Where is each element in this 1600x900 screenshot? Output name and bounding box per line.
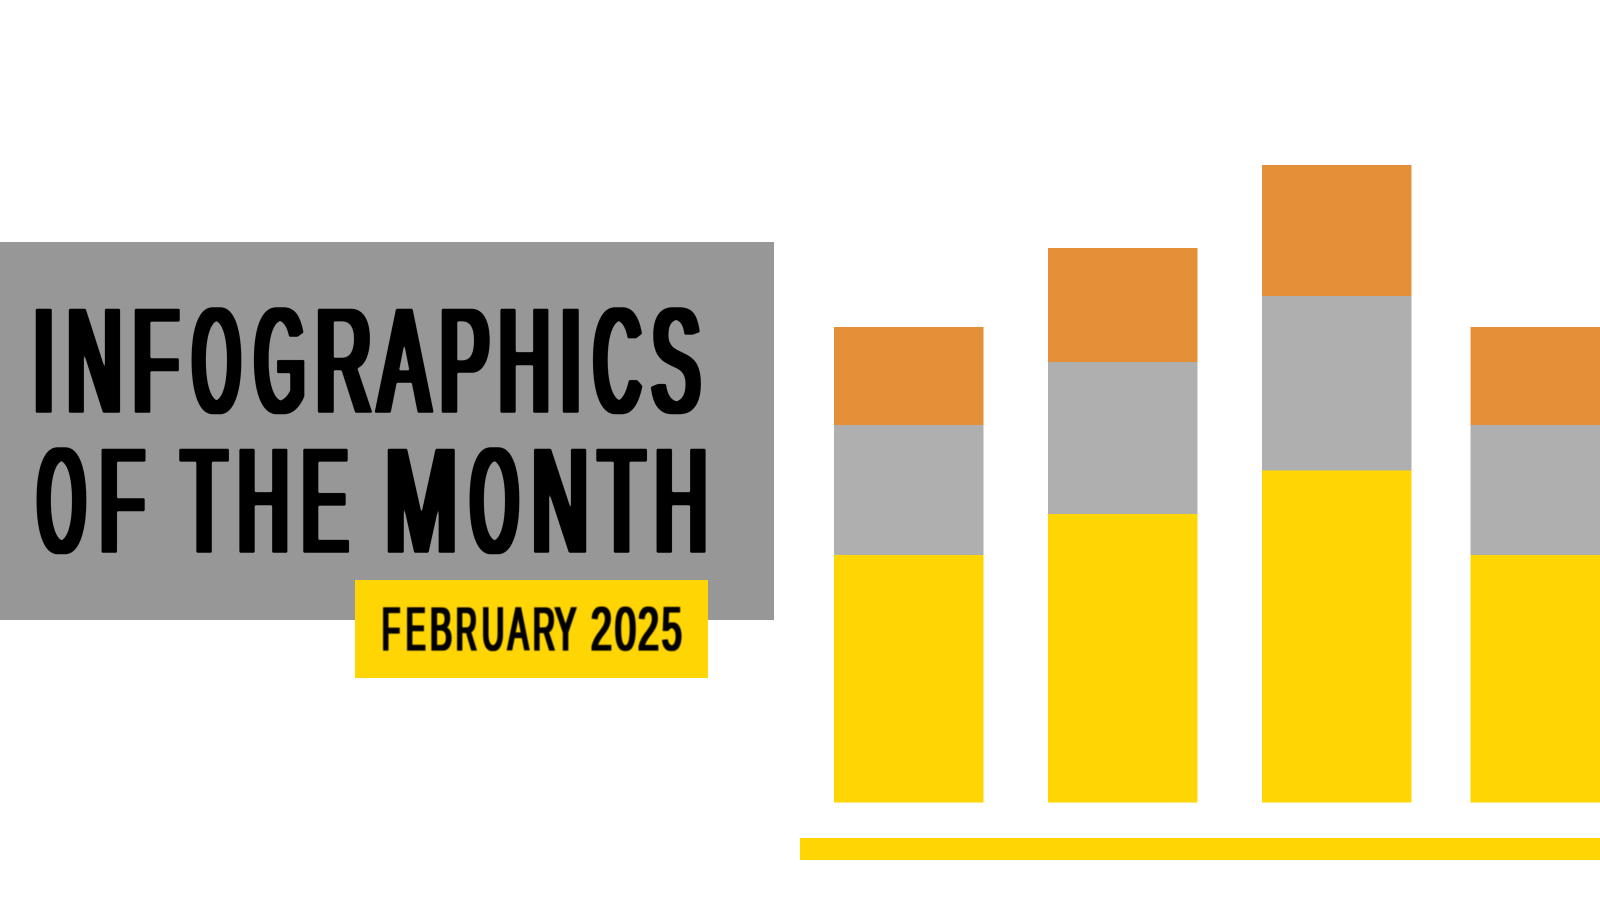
title line 2: E <box>302 417 347 584</box>
date text: Y <box>555 595 576 663</box>
date text: 2 <box>591 595 612 663</box>
date text: 5 <box>662 595 682 663</box>
title line 2: T <box>182 417 226 584</box>
panel: title background <box>0 242 774 620</box>
title line 2: O <box>470 417 517 584</box>
title line 2 <box>36 417 707 584</box>
title line 2: F <box>100 417 144 584</box>
title line 1: C <box>594 277 641 444</box>
bar 3 <box>1262 165 1412 802</box>
date text: 2 <box>638 595 659 663</box>
title line 2: M <box>385 417 458 584</box>
date text <box>382 595 682 663</box>
bar 4 <box>1470 327 1600 802</box>
title line 1: I <box>33 277 55 444</box>
title line 2: O <box>38 417 84 584</box>
bar 2 <box>1048 248 1198 802</box>
title line 2: H <box>238 417 288 584</box>
date text: F <box>382 595 400 663</box>
title line 1: S <box>652 277 700 444</box>
title line 2: T <box>599 417 644 584</box>
date badge <box>355 580 708 678</box>
title line 1: H <box>499 277 549 444</box>
bar 1 <box>834 327 984 802</box>
date text: U <box>482 595 504 663</box>
title line 1: N <box>67 277 121 444</box>
title line 1: G <box>255 277 305 444</box>
title line 1: I <box>560 277 582 444</box>
date text: R <box>533 595 555 663</box>
date text: B <box>430 595 452 663</box>
title line 1 <box>33 277 701 444</box>
date text: E <box>406 595 425 663</box>
title line 1: O <box>192 277 239 444</box>
title line 1: P <box>440 277 489 444</box>
date text: A <box>508 595 529 663</box>
title line 1: R <box>316 277 371 444</box>
date text: 0 <box>615 595 636 663</box>
chart baseline <box>800 838 1600 860</box>
title line 1: F <box>133 277 179 444</box>
title <box>33 277 707 584</box>
title line 2: N <box>532 417 588 584</box>
title line 2: H <box>654 417 707 584</box>
date text: R <box>456 595 477 663</box>
title line 1: A <box>379 277 430 444</box>
